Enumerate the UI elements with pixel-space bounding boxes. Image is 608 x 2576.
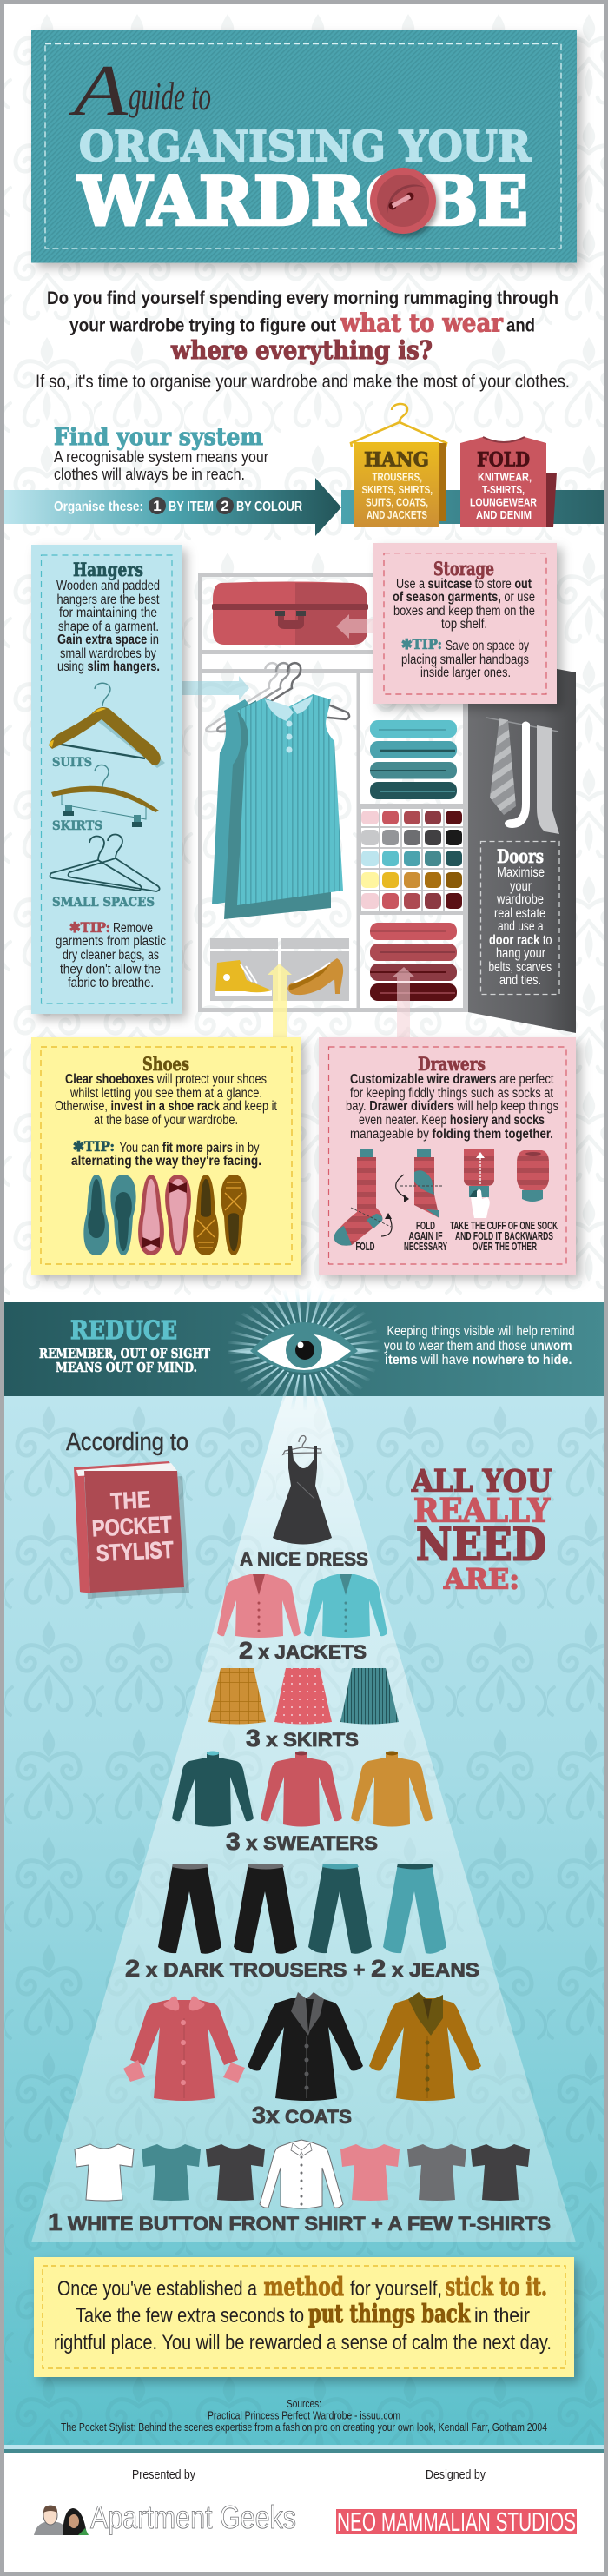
- icon: eye: [228, 1306, 379, 1393]
- shoe boxes: [210, 938, 349, 1001]
- heading: storage: Storage: [433, 558, 494, 579]
- label: 2 x jackets: 2 x JACKETS: [239, 1637, 367, 1664]
- panel: hangers: [31, 545, 182, 1014]
- title script: A guide to: A: [69, 50, 129, 131]
- sources: Sources:: [287, 2397, 321, 2410]
- icon: pocket stylist book: [74, 1461, 189, 1599]
- icon: dark jeans: [308, 1864, 372, 1954]
- heading: find your system: Find your system: [54, 424, 263, 451]
- subheading: out of sight: [39, 1346, 211, 1375]
- label: shirts: 1 WHITE BUTTON FRONT SHIRT + A FEW T-SHIRTS: [48, 2208, 551, 2235]
- icon: folded stack red: [370, 923, 457, 1001]
- title script: A guide to: [69, 50, 211, 131]
- body text: shoes: at the base of your wardrobe.: [94, 1113, 238, 1128]
- icon: pink t-shirt: [340, 2144, 400, 2201]
- heading: drawers: Drawers: [418, 1053, 486, 1075]
- intro text: Do you find yourself spending every morning rummaging through: [47, 288, 558, 308]
- tip: shoes: You can fit more pairs in by: [120, 1141, 260, 1156]
- tip: storage: ✱TIP:: [401, 636, 442, 652]
- icon: dark t-shirt: [471, 2144, 530, 2201]
- logo: apartment geeks: Apartment Geeks: [90, 2500, 296, 2535]
- tip: storage: inside larger ones.: [420, 666, 511, 680]
- panel: fold: LOUNGEWEAR: [470, 495, 537, 509]
- logo: apartment geeks: [34, 2500, 296, 2535]
- panel: shoes: [31, 1037, 301, 1275]
- text: doors: real estate: [494, 906, 545, 921]
- panel: fold: T-SHIRTS,: [482, 483, 525, 496]
- sources: Practical Princess Perfect Wardrobe - issuu.com: [208, 2408, 400, 2422]
- icon: mustard sweater: [351, 1752, 433, 1826]
- intro text: [36, 288, 570, 392]
- labels: sock steps: AND FOLD IT BACKWARDS: [455, 1230, 553, 1242]
- colour swatch grid: [360, 805, 463, 915]
- band: reduce: [4, 1302, 604, 1396]
- panel: hang: SUITS, COATS,: [366, 495, 428, 509]
- organise these label: 1: [153, 498, 162, 514]
- tip: storage: Save on space by: [446, 639, 529, 653]
- footer: presented by: [34, 2467, 296, 2535]
- icon: dress: [212, 694, 343, 919]
- panel: hang: SKIRTS, SHIRTS,: [361, 483, 433, 496]
- panel: hang: TROUSERS,: [372, 471, 422, 483]
- tip: storage: [401, 636, 529, 680]
- icon: tie: [490, 718, 516, 815]
- body text: hangers: Wooden and padded: [56, 579, 160, 593]
- body text: storage: boxes and keep them on the: [393, 604, 535, 619]
- body text: drawers: [346, 1072, 558, 1142]
- arrow: storage to suitcase: [336, 614, 373, 639]
- icon: high heel: [287, 958, 343, 995]
- label: suits: SUITS: [52, 756, 92, 770]
- icon: hangers on rail: [206, 663, 349, 732]
- heading: find your system: A recognisable system means your: [54, 448, 268, 466]
- heading: all you really need are: [411, 1463, 552, 1595]
- heading: hangers: Hangers: [73, 559, 143, 580]
- intro text: and: [506, 316, 535, 335]
- tip: storage: placing smaller handbags: [401, 652, 529, 667]
- tip: hangers: [56, 919, 166, 990]
- body text: storage: [393, 577, 535, 632]
- body text: storage: Use a suitcase to store out: [396, 577, 532, 592]
- text: doors: Doors: [497, 845, 544, 867]
- labels: sock steps: [356, 1220, 558, 1253]
- panel: hang: [351, 404, 446, 527]
- text: doors: and ties.: [499, 973, 541, 988]
- heading: reduce: REDUCE: [70, 1315, 177, 1345]
- icon: teal t-shirt: [142, 2144, 201, 2201]
- labels: sock steps: FOLD: [416, 1220, 435, 1232]
- label: small spaces: SMALL SPACES: [52, 896, 155, 910]
- heading: find your system: [54, 424, 268, 483]
- callout: stick to it: stick to it.: [445, 2272, 547, 2301]
- organise these label: [54, 497, 302, 514]
- icon: belt: [505, 721, 530, 828]
- panel: hang: HANG: [364, 448, 429, 471]
- body text: drawers: for keeping fiddly things such as socks at: [350, 1086, 554, 1101]
- body text: shoes: Otherwise, invest in a shoe rack and keep it: [55, 1099, 278, 1114]
- icon: red button: [370, 168, 436, 234]
- label: 3 x sweaters: 3 x SWEATERS: [226, 1828, 378, 1855]
- body text: hangers: Gain extra space in: [57, 632, 159, 647]
- text: doors: wardrobe: [496, 892, 544, 907]
- panel: fold: [460, 437, 557, 527]
- body text: hangers: hangers are the best: [57, 593, 160, 607]
- labels: sock steps: FOLD: [356, 1241, 375, 1253]
- labels: sock steps: AGAIN IF: [408, 1230, 443, 1242]
- icon: sock step two: [396, 1149, 444, 1218]
- organise these label: BY COLOUR: [236, 500, 302, 514]
- icon: white t-shirt: [75, 2144, 134, 2201]
- text: keeping things visible: [384, 1324, 575, 1367]
- icon: sock step three: [464, 1149, 494, 1218]
- tip: hangers: Remove: [113, 921, 153, 936]
- labels: sock steps: OVER THE OTHER: [473, 1241, 537, 1253]
- text: doors: Maximise: [497, 865, 545, 880]
- body text: shoes: Clear shoeboxes will protect your shoes: [65, 1072, 267, 1087]
- icon: black trousers two: [234, 1864, 297, 1954]
- tip: hangers: ✱TIP:: [69, 919, 110, 936]
- label: trousers and jeans: 2 x DARK TROUSERS + 2 x JEANS: [125, 1955, 479, 1982]
- title line: wardrobe: WARDROBE: [77, 162, 528, 242]
- icon: row of shoes: [83, 1175, 247, 1255]
- icon: light jeans: [383, 1864, 446, 1954]
- icon: pleated skirt: [340, 1668, 399, 1724]
- callout: stick to it: Once you've established a: [57, 2277, 258, 2301]
- panel: storage: [373, 543, 557, 704]
- icon: black trousers one: [158, 1864, 221, 1954]
- text: doors: [481, 841, 559, 994]
- icon: charcoal t-shirt: [206, 2144, 265, 2201]
- icon: suits hanger: [49, 683, 165, 768]
- text: doors: and use a: [498, 919, 544, 934]
- icon: dress: [273, 1436, 332, 1545]
- callout: stick to it: for yourself,: [350, 2277, 442, 2301]
- panel: fold: FOLD: [477, 448, 530, 471]
- label: 3x coats: 3x COATS: [252, 2102, 352, 2129]
- intro text: where everything is?: [170, 335, 433, 365]
- intro text: what to wear: [340, 308, 504, 337]
- title script: A guide to: guide to: [129, 74, 211, 118]
- callout: stick to it: method: [264, 2272, 344, 2301]
- icon: teal sweater: [172, 1752, 254, 1826]
- body text: hangers: for maintaining the: [59, 606, 157, 620]
- wardrobe illustration: [198, 573, 576, 1033]
- icon: scarf: [537, 725, 559, 834]
- footer: presented by: Presented by: [132, 2467, 195, 2482]
- text: doors: your: [510, 879, 532, 894]
- panel: fold: KNITWEAR,: [478, 471, 532, 483]
- icon: brown coat: [369, 1992, 481, 2101]
- body text: drawers: even neater. Keep hosiery and socks: [359, 1113, 545, 1128]
- panel: hang: AND JACKETS: [367, 508, 427, 521]
- icon: sock step four: [517, 1150, 549, 1202]
- intro text: your wardrobe trying to figure out: [69, 316, 336, 335]
- tip: hangers: fabric to breathe.: [68, 976, 154, 990]
- title banner: [31, 30, 577, 262]
- body text: hangers: [56, 579, 160, 674]
- icon: teal jacket: [304, 1574, 387, 1638]
- organise these label: BY ITEM: [169, 500, 214, 514]
- callout: stick to it: in their: [474, 2304, 530, 2328]
- tip: hangers: dry cleaner bags, as: [63, 948, 159, 963]
- body text: hangers: small wardrobes by: [60, 646, 156, 661]
- heading: all you really need are: NEED: [416, 1519, 546, 1571]
- heading: all you really need are: ALL YOU: [411, 1463, 552, 1500]
- icon: wire hangers: [50, 834, 160, 891]
- icon: grey t-shirt: [407, 2144, 466, 2201]
- callout: stick to it: Take the few extra seconds to: [76, 2304, 304, 2328]
- body text: hangers: shape of a garment.: [58, 619, 159, 634]
- body text: shoes: [55, 1072, 278, 1128]
- label: skirts: SKIRTS: [52, 819, 102, 833]
- heading: find your system: clothes will always be in reach.: [54, 466, 245, 483]
- text: doors: hang your: [496, 946, 545, 961]
- body text: drawers: manageable by folding them together.: [350, 1127, 553, 1142]
- body text: shoes: whilst letting you see them at a glance.: [69, 1086, 262, 1101]
- subheading: out of sight: REMEMBER, OUT OF SIGHT: [39, 1346, 211, 1361]
- icon: skirts hanger: [51, 765, 159, 827]
- icon: folded stack teal: [370, 720, 457, 799]
- section background: essentials: [4, 1396, 604, 2445]
- subheading: out of sight: MEANS OUT OF MIND.: [56, 1360, 197, 1375]
- icon: black coat: [248, 1992, 363, 2101]
- icon: suitcase: [212, 582, 368, 645]
- arrow band: [4, 478, 604, 536]
- footer: designed by: Designed by: [426, 2467, 486, 2482]
- heading: shoes: Shoes: [142, 1053, 189, 1075]
- door accessories: [486, 718, 559, 834]
- icon: pocket stylist book: STYLIST: [96, 1537, 175, 1566]
- tip: shoes: [71, 1138, 261, 1169]
- text: doors: belts, scarves: [488, 960, 552, 975]
- organise these label: 2: [221, 498, 229, 514]
- icon: pocket stylist book: POCKET: [91, 1512, 173, 1541]
- text: doors: door rack to: [489, 933, 552, 948]
- sources: [61, 2397, 547, 2434]
- body text: storage: top shelf.: [441, 617, 487, 632]
- callout: stick to it: [34, 2257, 574, 2377]
- icon: white button shirt: [260, 2140, 343, 2208]
- icon: sneaker: [215, 960, 272, 996]
- text: keeping things visible: items will have nowhere to hide.: [385, 1353, 572, 1367]
- panel: drawers: [319, 1037, 576, 1275]
- icon: check skirt: [208, 1668, 266, 1724]
- tip: hangers: they don't allow the: [60, 963, 161, 977]
- heading: all you really need are: ARE:: [443, 1562, 519, 1595]
- footer: designed by: [336, 2467, 577, 2537]
- footer divider: [4, 2445, 604, 2453]
- icon: sock step one: [334, 1149, 392, 1246]
- text: according to: According to: [66, 1428, 188, 1456]
- arrow: hangers to dress: [182, 676, 249, 700]
- text: keeping things visible: Keeping things visible will help remind: [387, 1324, 575, 1339]
- body text: hangers: using slim hangers.: [57, 659, 160, 674]
- label: 3 x skirts: 3 x SKIRTS: [246, 1725, 359, 1752]
- title line: organising your: ORGANISING YOUR: [79, 123, 532, 171]
- icon: pink coat: [123, 1996, 245, 2101]
- tip: hangers: garments from plastic: [56, 934, 166, 949]
- arrow: drawers: [392, 967, 415, 1037]
- labels: sock steps: NECESSARY: [404, 1241, 447, 1253]
- icon: red sweater: [261, 1752, 342, 1826]
- icon: pink jacket: [217, 1574, 301, 1638]
- body text: drawers: Customizable wire drawers are perfect: [350, 1072, 554, 1087]
- text: keeping things visible: you to wear them and those unworn: [384, 1339, 572, 1354]
- icon: pocket stylist book: THE: [110, 1487, 151, 1514]
- organise these label: Organise these:: [54, 500, 143, 514]
- body text: storage: of season garments, or use: [393, 590, 535, 605]
- wardrobe frame: [198, 573, 468, 1012]
- arrow: shoes: [268, 964, 292, 1037]
- tip: shoes: alternating the way they're facing.: [71, 1154, 261, 1169]
- heading: all you really need are: REALLY: [413, 1491, 551, 1529]
- label: a nice dress: A NICE DRESS: [240, 1548, 368, 1570]
- tip: shoes: ✱TIP:: [73, 1138, 115, 1155]
- body text: drawers: bay. Drawer dividers will help keep things: [346, 1099, 558, 1114]
- panel: fold: AND DENIM: [476, 508, 532, 521]
- icon: dotted skirt: [274, 1668, 332, 1724]
- callout: stick to it: put things back: [308, 2299, 471, 2328]
